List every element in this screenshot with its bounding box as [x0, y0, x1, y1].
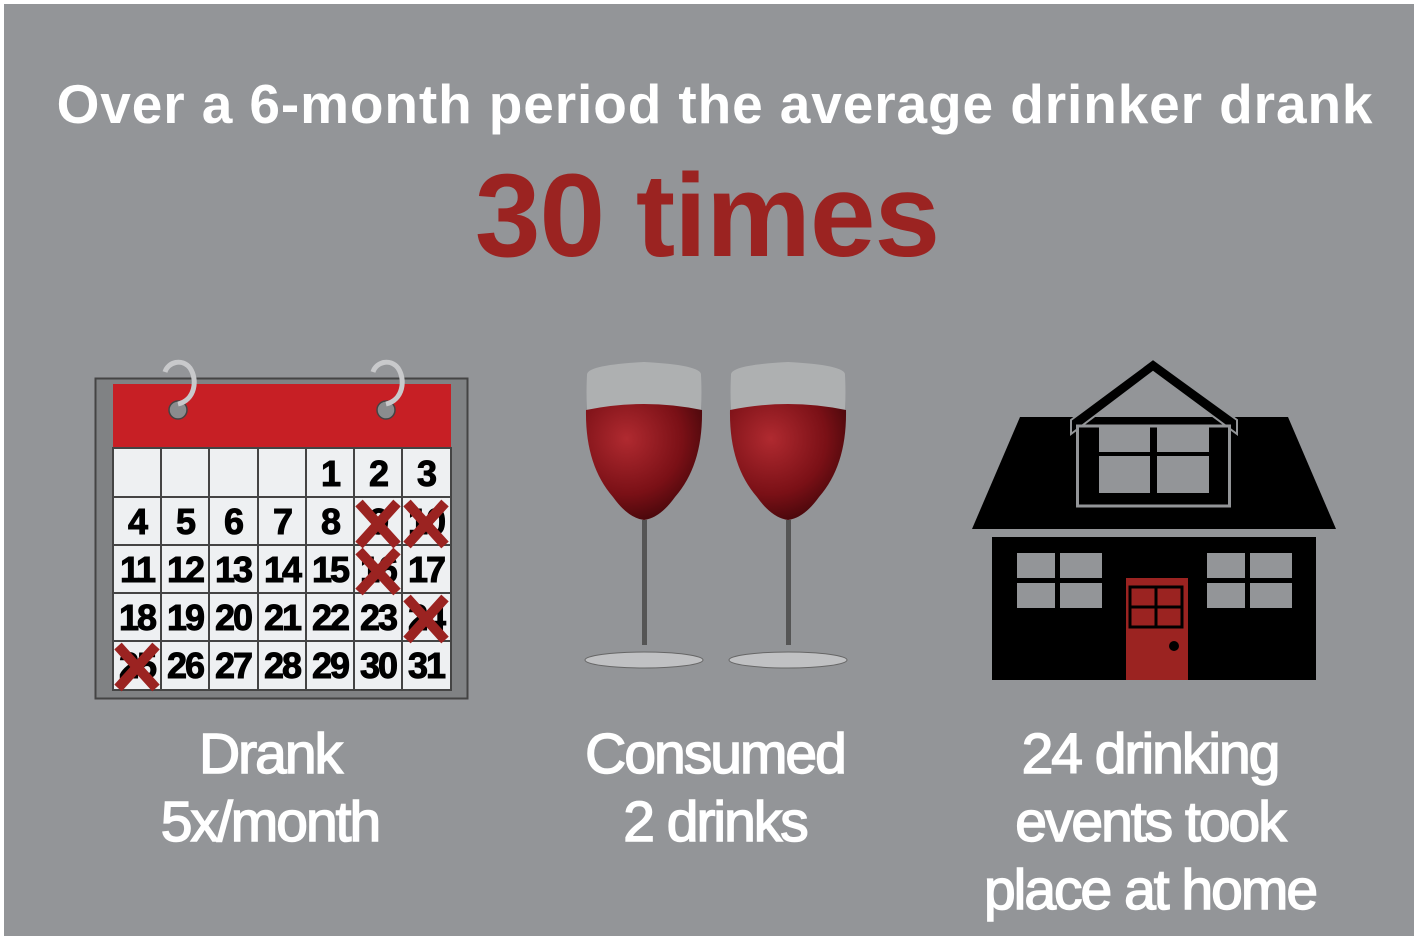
- icon: calendar: 14: [264, 549, 302, 590]
- icon: calendar: 2: [369, 453, 388, 494]
- icon: calendar: 1: [321, 453, 341, 494]
- icon: calendar: 13: [215, 549, 252, 590]
- icon: calendar: 7: [273, 501, 292, 542]
- icon: calendar: 4: [128, 501, 148, 542]
- icon: calendar: 11: [120, 549, 156, 590]
- icon: calendar: 19: [167, 597, 204, 638]
- icon: calendar: 15: [312, 549, 350, 590]
- icon: calendar: 29: [312, 645, 349, 686]
- caption: house: 24 drinking: [1022, 722, 1278, 786]
- icon: calendar: 10: [408, 501, 445, 542]
- caption: glasses: [585, 722, 845, 854]
- icon: calendar: 18: [119, 597, 156, 638]
- caption: calendar: Drank: [199, 722, 341, 786]
- icon: calendar: 8: [321, 501, 340, 542]
- caption: house: place at home: [984, 858, 1316, 922]
- icon: calendar: 21: [264, 597, 302, 638]
- icon: calendar: 24: [408, 597, 446, 638]
- icon: calendar: 25: [119, 645, 157, 686]
- icon: calendar: 17: [408, 549, 445, 590]
- icon: calendar: 27: [215, 645, 252, 686]
- caption: house: events took: [1015, 790, 1285, 854]
- caption: glasses: Consumed: [585, 722, 845, 786]
- icon: calendar: 3: [417, 453, 436, 494]
- icon: calendar: 6: [224, 501, 243, 542]
- icon: calendar: 20: [215, 597, 252, 638]
- icon: calendar: 12: [167, 549, 204, 590]
- caption: calendar: 5x/month: [161, 790, 379, 854]
- icon: calendar: 26: [167, 645, 204, 686]
- caption: glasses: 2 drinks: [623, 790, 807, 854]
- icon: calendar: 5: [176, 501, 196, 542]
- icon: calendar: 30: [360, 645, 397, 686]
- icon: calendar: 22: [312, 597, 349, 638]
- icon: calendar: 31: [408, 645, 446, 686]
- icon: calendar: 23: [360, 597, 397, 638]
- title: Over a 6-month period the average drinker drank: [57, 73, 1373, 135]
- icon: calendar: 16: [360, 549, 397, 590]
- icon: calendar: 28: [264, 645, 301, 686]
- headline number: 30 times: [475, 150, 939, 282]
- caption: house: [984, 722, 1316, 922]
- icon: calendar: 9: [369, 501, 388, 542]
- caption: calendar: [161, 722, 379, 854]
